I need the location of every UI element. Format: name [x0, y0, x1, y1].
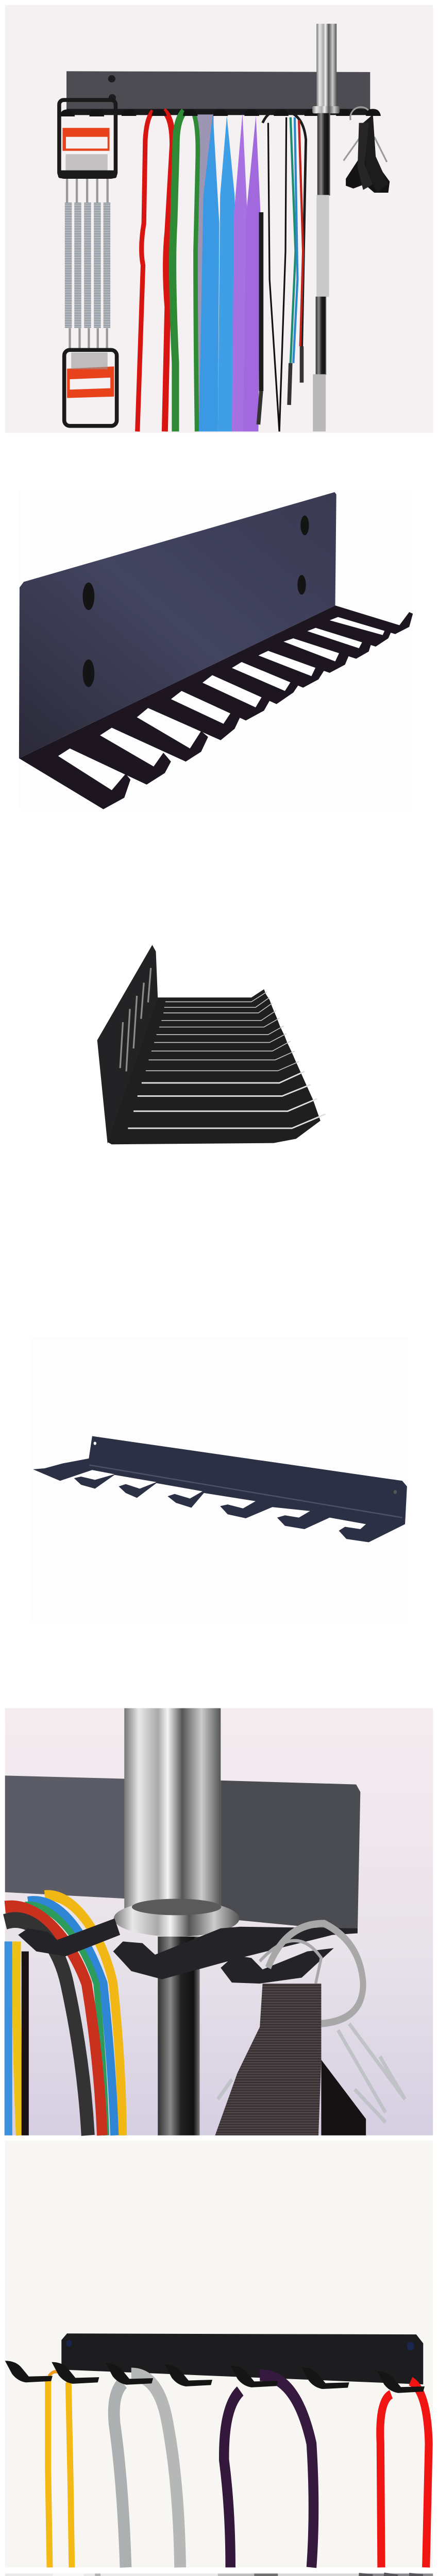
barbell: [312, 24, 340, 432]
bands: [48, 2371, 429, 2567]
panel: white wall with loop bands: [5, 2141, 433, 2567]
right plate: [221, 1781, 360, 1931]
wall plate with cutouts: [97, 945, 158, 1144]
loop bands: [138, 110, 306, 432]
prongs: [108, 989, 326, 1144]
wall-mounted rack plate: [66, 71, 370, 115]
hook row: [60, 109, 381, 116]
hooks: [5, 2361, 425, 2393]
cable handles: [344, 107, 390, 193]
chest expander: [58, 100, 117, 426]
panel: navy rack low angle view: [31, 1337, 408, 1623]
resistance tubes: [5, 1895, 122, 2136]
rack plate: [61, 2333, 423, 2384]
hooks: [18, 1919, 358, 1984]
barbell: [114, 1708, 240, 2136]
panel: POWERMAN rack on squat stand: [5, 2573, 433, 2576]
background uprights: [53, 2573, 433, 2576]
panel: barbell and resistance tube close-up: [5, 1708, 433, 2136]
gym ring clips: [218, 1923, 405, 2122]
panel: black rack angled view: [19, 490, 413, 809]
left plate: [5, 1775, 128, 1899]
mounting screws: [82, 516, 309, 687]
wall plate: [19, 492, 336, 758]
hook comb shelf: [19, 605, 413, 809]
panel: black rack side view: [97, 945, 326, 1144]
strap: [215, 1984, 321, 2136]
panel: rack with bands and barbell photo: [5, 5, 433, 433]
